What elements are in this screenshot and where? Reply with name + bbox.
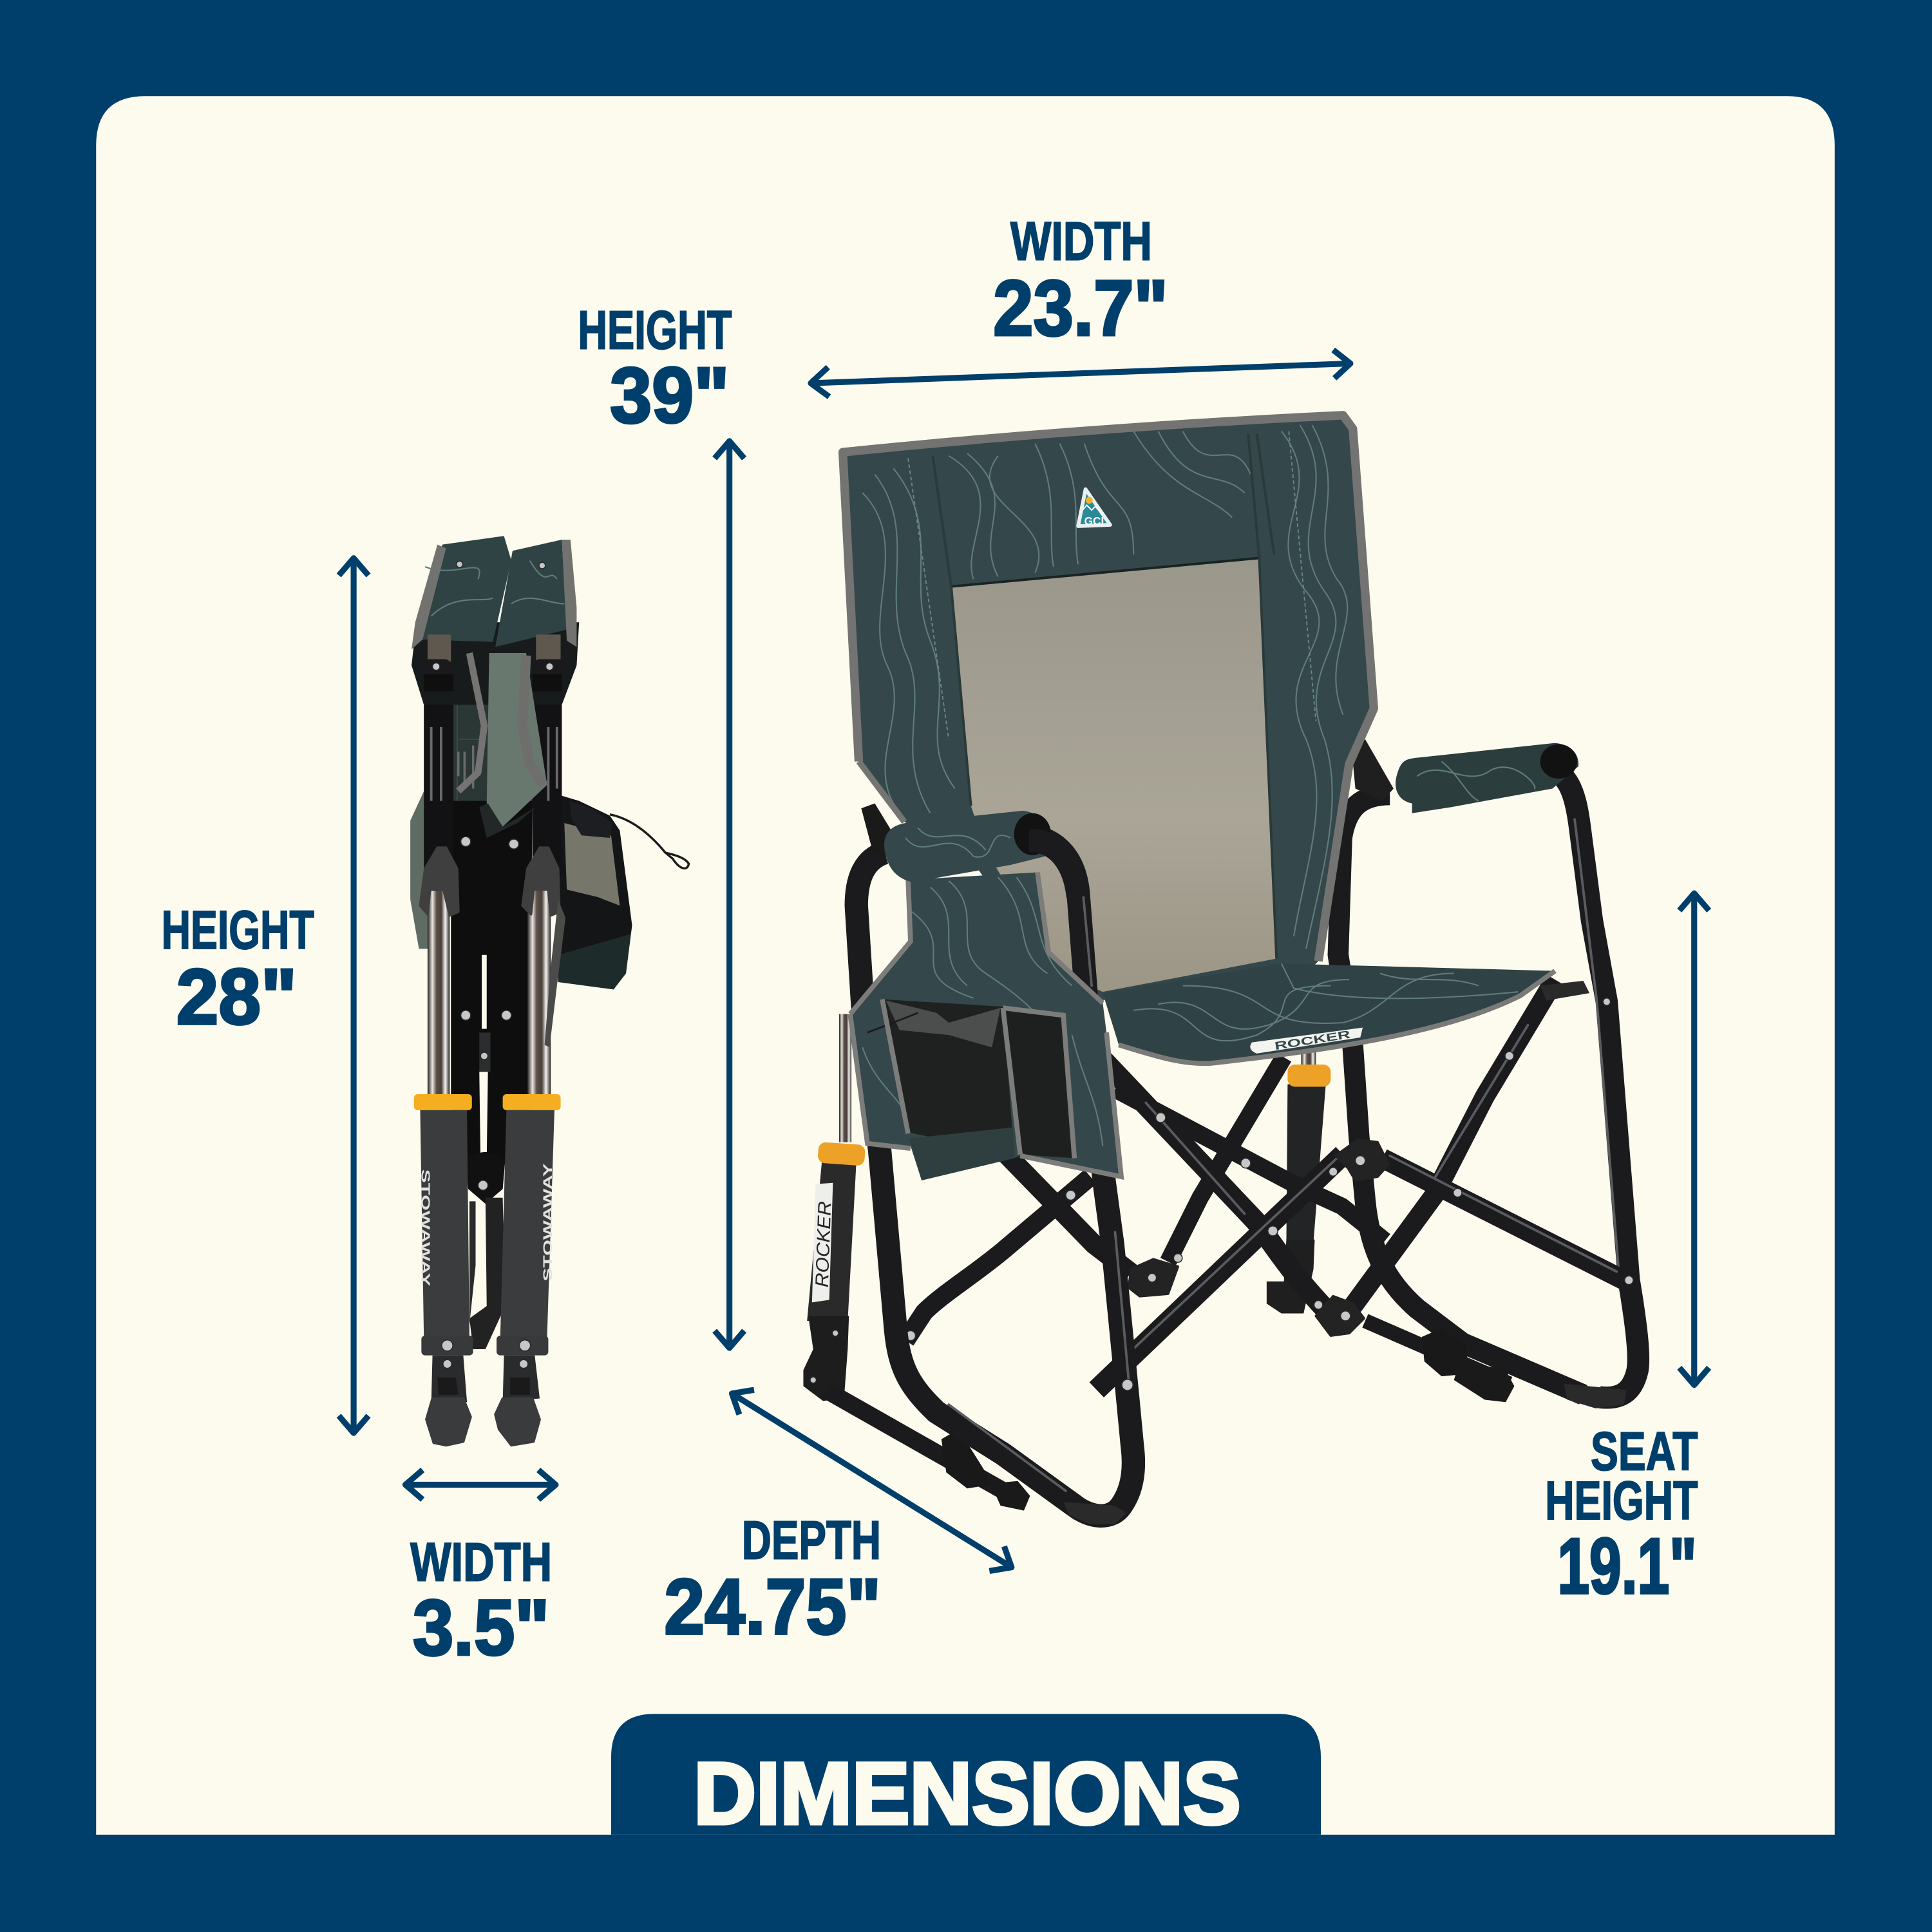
left rocker cylinder (803, 1014, 866, 1401)
left arm pivot (861, 803, 896, 859)
phone pocket (1003, 1008, 1074, 1158)
folded chair: grey guards (420, 848, 560, 916)
arrow: folded height (339, 558, 368, 1433)
arrow: back width (811, 350, 1350, 397)
text: ROCKER: ROCKER (1274, 1028, 1352, 1052)
seat logo (1250, 1028, 1363, 1054)
label: depth 24.75: 24.75" (664, 1562, 881, 1651)
pouch drawstring (610, 815, 689, 868)
right arm tube (1546, 766, 1638, 1397)
folded chair: rear fabric (410, 788, 433, 949)
label: seat height 19.1: SEAT (1591, 1421, 1698, 1482)
right arm pivot (1352, 739, 1394, 801)
text: left cylinder STOWAWAY: STOWAWAY (419, 1170, 431, 1286)
drawstring gather (886, 1001, 1001, 1047)
folded chair: right cylinder (497, 1110, 555, 1356)
folded chair: right foot (495, 1356, 540, 1445)
label: folded width 3.5 (410, 1532, 552, 1672)
heading: DIMENSIONS: DIMENSIONS (694, 1745, 1241, 1842)
label: folded height 28: 28" (176, 952, 297, 1041)
rear frame tube (1338, 795, 1584, 1395)
label: folded width 3.5: 3.5" (413, 1584, 549, 1672)
backrest (842, 413, 1374, 1004)
rocking chair (803, 413, 1638, 1524)
folded chair: left cylinder (419, 1110, 473, 1356)
seams (951, 558, 1258, 587)
folded chair: centre frame (451, 641, 533, 1349)
arrow: folded width (405, 1470, 556, 1499)
folded chair: centre grey-green fabric (459, 653, 547, 838)
label: seat height 19.1: 19.1" (1557, 1522, 1697, 1610)
front cross bars (905, 1025, 1624, 1390)
centre post (1267, 1041, 1331, 1314)
seat (1103, 963, 1555, 1063)
folded chair: chrome rods (428, 889, 551, 1097)
side pocket panel (850, 873, 1121, 1180)
folded chair: pouch (558, 795, 689, 989)
seat bracket (1540, 981, 1589, 1001)
left arm and front frame tube (857, 835, 1633, 1524)
contour lines (862, 425, 1347, 949)
folded chair: webbing strap (545, 900, 565, 1047)
left arm tube top (1029, 840, 1078, 897)
label: height 39: 39" (610, 351, 730, 439)
text: GCI: GCI (1084, 515, 1104, 527)
folded chair: left foot (426, 1356, 471, 1445)
text: ROCKER label: ROCKER (812, 1201, 835, 1288)
folded chair: hinge caps (420, 634, 565, 691)
label: depth 24.75: DEPTH (742, 1510, 881, 1570)
title tab (611, 1714, 1321, 1842)
front under-seat bars (1103, 980, 1555, 1311)
text: right cylinder STOWAWAY: STOWAWAY (542, 1163, 555, 1282)
folded chair: black tubes (424, 680, 562, 877)
label: width 23.7 (993, 211, 1168, 352)
folded chair: yellow collars (414, 1094, 561, 1110)
folded chair: top fabric rolls (412, 536, 576, 649)
label: seat height 19.1: HEIGHT (1545, 1470, 1698, 1531)
folded chair (410, 536, 689, 1445)
binding (843, 415, 1374, 961)
label: seat height 19.1 (1545, 1421, 1698, 1610)
right arm pad (1396, 743, 1578, 813)
mesh pocket (882, 999, 1014, 1155)
logo badge (1078, 489, 1110, 527)
label: folded height 28: HEIGHT (162, 900, 314, 960)
arrow: seat height (1680, 893, 1709, 1385)
label: depth 24.75 (664, 1510, 881, 1651)
left arm pad (884, 811, 1051, 882)
rear cross bars (1004, 1057, 1514, 1402)
label: width 23.7: 23.7" (993, 263, 1168, 352)
front foot bar (826, 1390, 1030, 1511)
mesh panel (951, 558, 1276, 992)
label: folded height 28 (162, 900, 314, 1041)
label: folded width 3.5: WIDTH (410, 1532, 552, 1593)
folded chair: underside of rolls (412, 622, 579, 705)
arrow: chair height (715, 441, 744, 1348)
arrow: depth (732, 1390, 1012, 1571)
label: height 39 (578, 299, 732, 439)
label: width 23.7: WIDTH (1010, 211, 1152, 272)
label: height 39: HEIGHT (578, 299, 732, 360)
